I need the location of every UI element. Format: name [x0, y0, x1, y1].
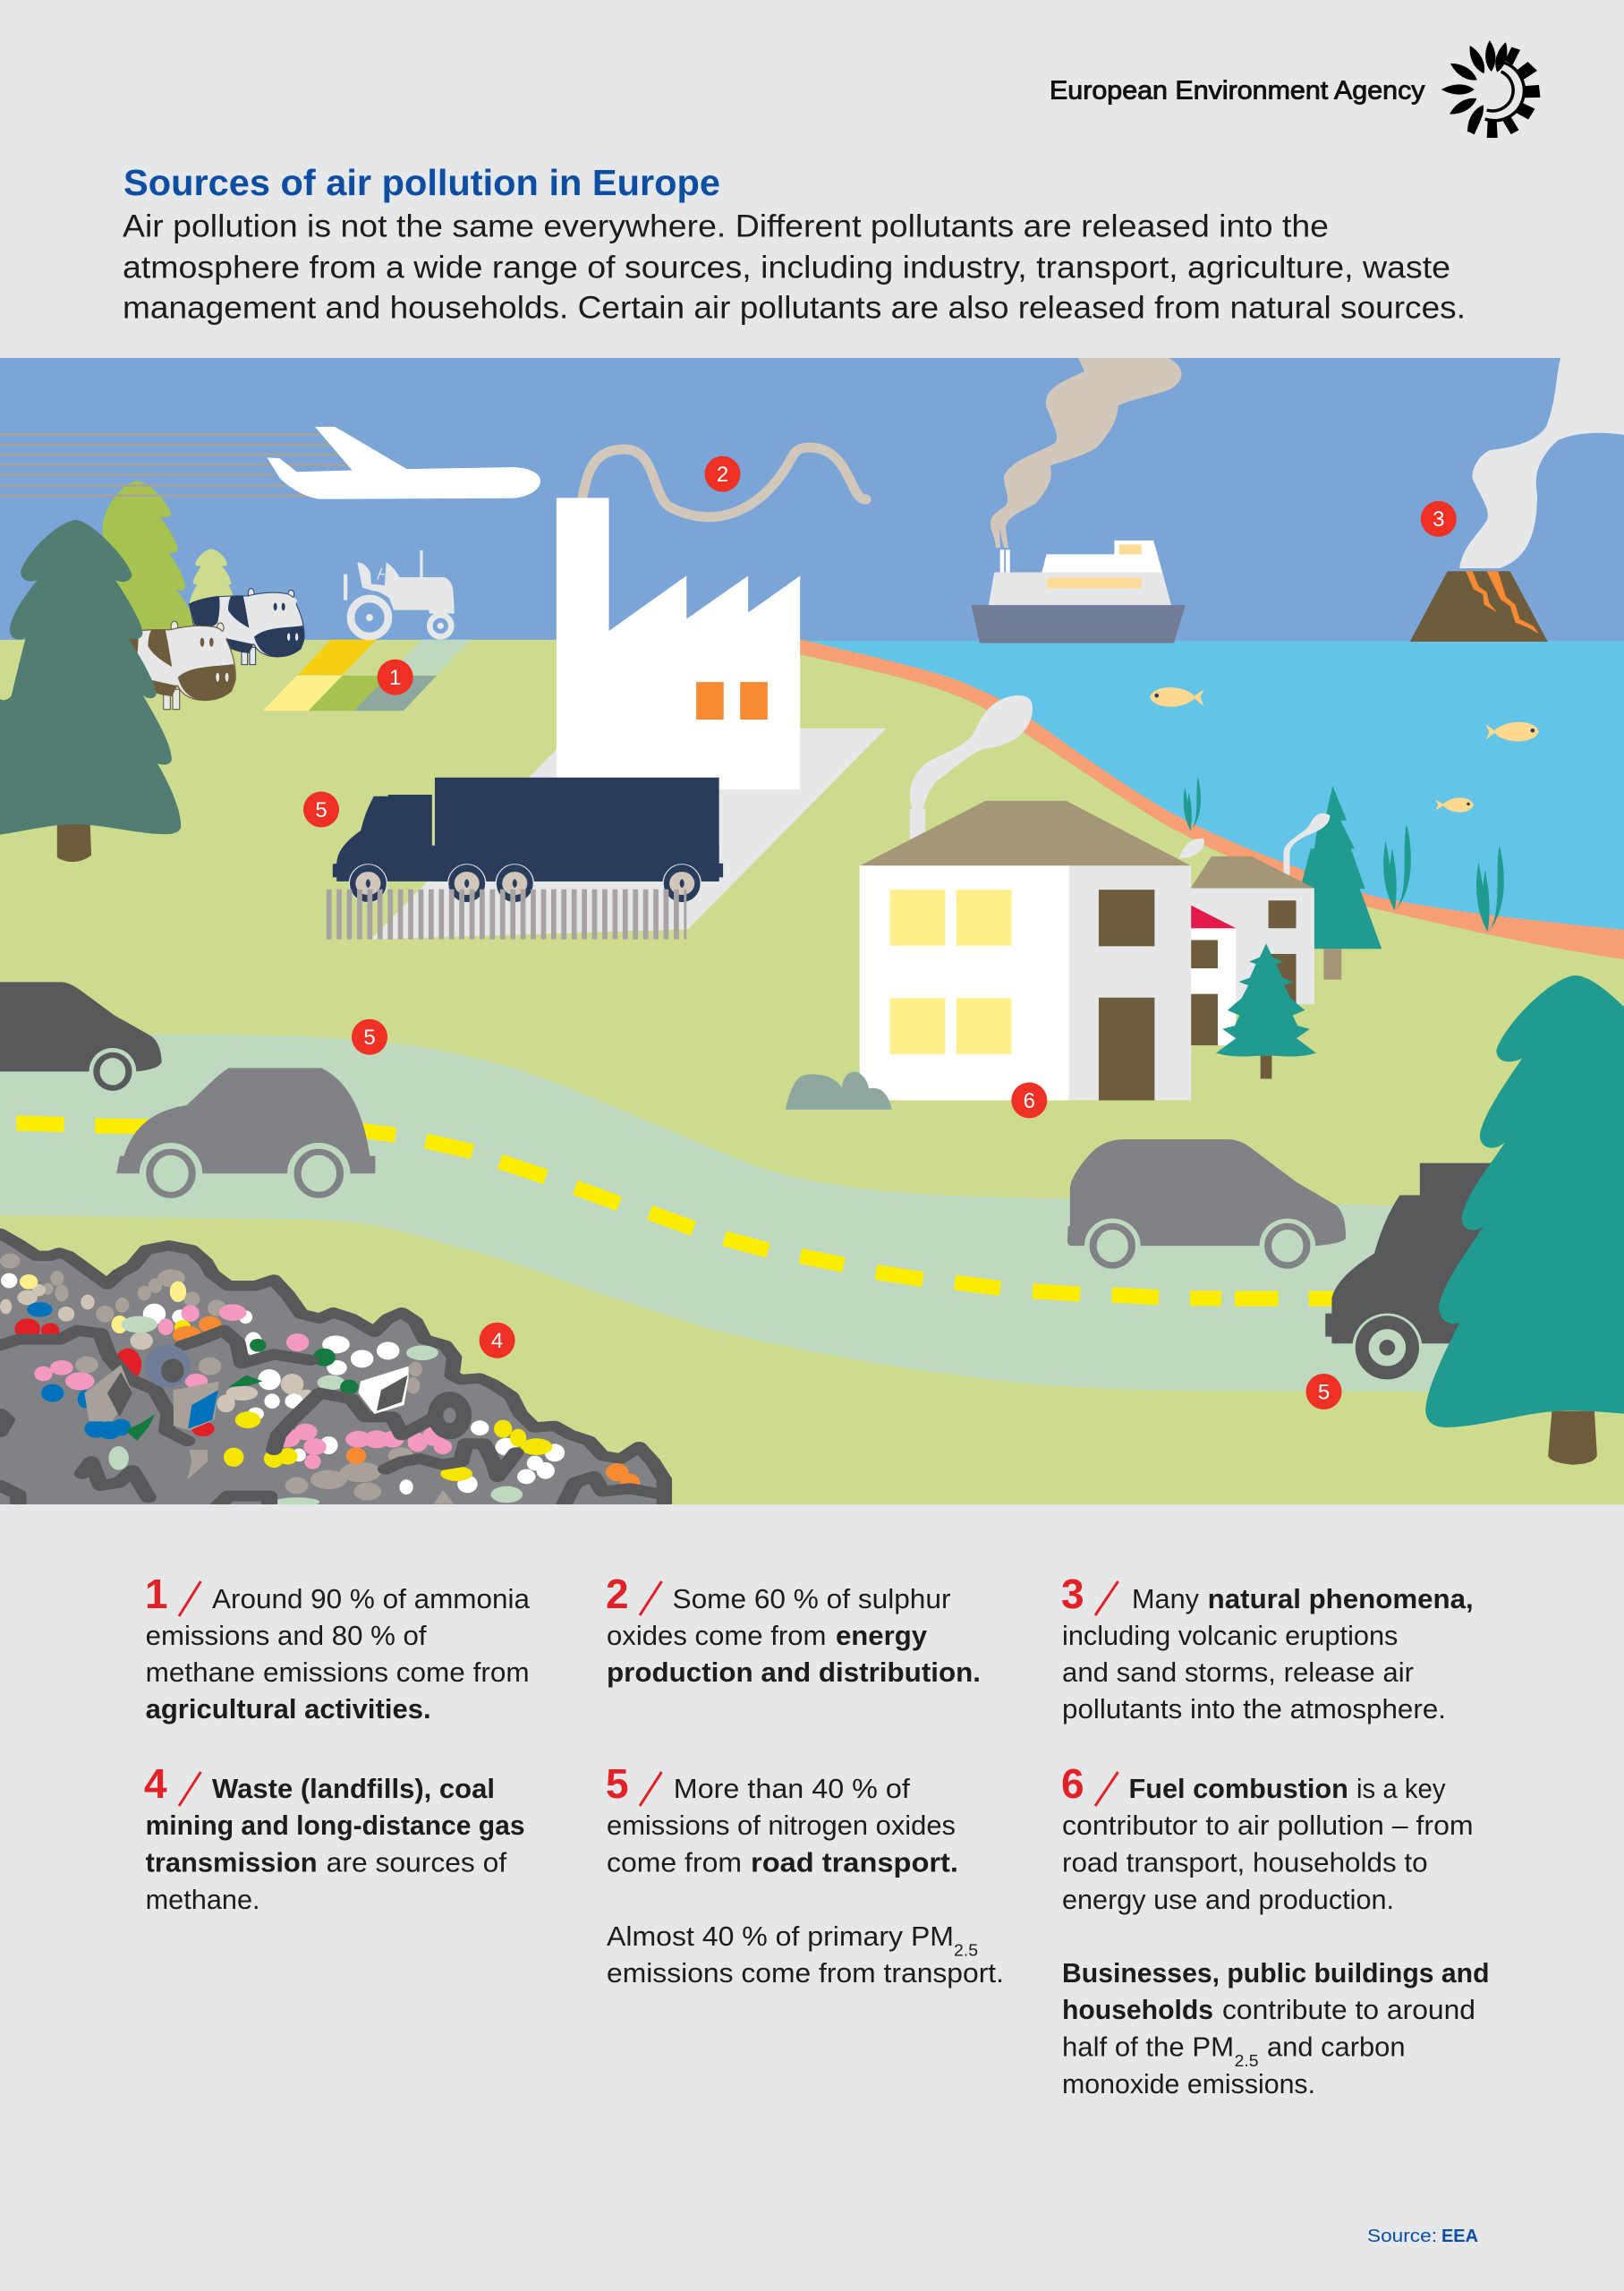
text block 6: households — [1062, 1995, 1213, 2025]
truck — [327, 778, 723, 915]
source — [1367, 2227, 1478, 2246]
text block 1: Around 90 % of ammonia — [212, 1584, 530, 1614]
landfill dark ridges — [0, 1331, 662, 1510]
text block 4 — [144, 1760, 525, 1915]
car: dark top left — [0, 982, 162, 1095]
text block 6: monoxide emissions. — [1062, 2069, 1315, 2099]
text block 6: Fuel combustion — [1129, 1774, 1348, 1804]
text block 5: Almost 40 % of primary PM — [607, 1921, 954, 1952]
sea — [792, 641, 1624, 972]
text block 5: 2.5 — [954, 1942, 978, 1960]
text block 5: emissions come from transport. — [607, 1958, 1004, 1989]
badge 5: road: 5 — [363, 1026, 376, 1050]
text block 6: contributor to air pollution – from — [1062, 1810, 1474, 1841]
bush — [786, 1072, 892, 1110]
truck: dark right — [1325, 1163, 1522, 1382]
badge 3: 3 — [1433, 507, 1444, 532]
text block 6: is a key — [1356, 1774, 1446, 1804]
ship smoke — [991, 358, 1182, 548]
text block 5: More than 40 % of — [674, 1774, 910, 1804]
tall teal tree — [1302, 786, 1382, 980]
coastline — [799, 639, 1624, 959]
middle house — [1191, 905, 1236, 1045]
text block 4: 4 — [144, 1760, 167, 1807]
text block 6: 2.5 — [1235, 2052, 1259, 2070]
big house chimney and smoke — [910, 695, 1204, 859]
text block 1: emissions and 80 % of — [146, 1621, 427, 1651]
text block 5: 5 — [606, 1760, 629, 1807]
badge 1: 1 — [389, 666, 401, 690]
badge 5: truck — [303, 791, 339, 827]
ship — [972, 541, 1186, 643]
waste: crate, tyre, computer, box — [84, 1345, 472, 1439]
logo: European Environment Agency: European Environment Agency — [1050, 77, 1425, 106]
landfill mound — [0, 1233, 664, 1519]
badge 4: 4 — [491, 1329, 503, 1353]
badge 5: road right: 5 — [1318, 1380, 1330, 1405]
text block 6: Businesses, public buildings and — [1062, 1958, 1489, 1989]
intro text: atmosphere from a wide range of sources, including industry, transport, agriculture, waste — [123, 251, 1450, 285]
text block 6: contribute to around — [1222, 1995, 1475, 2025]
text block 6: 6 — [1061, 1760, 1084, 1807]
text block 2: 2 — [606, 1571, 629, 1617]
text block 6: energy use and production. — [1062, 1885, 1394, 1915]
car: grey right — [1067, 1139, 1346, 1273]
text block 3 — [1061, 1571, 1474, 1725]
text block 2: production and distribution. — [607, 1657, 981, 1688]
land — [0, 640, 1624, 1504]
volcano — [1410, 571, 1548, 642]
cow: navy — [190, 589, 304, 665]
field plots — [262, 640, 471, 711]
source: EEA — [1441, 2227, 1478, 2246]
text block 1 — [145, 1571, 530, 1725]
text block 5: emissions of nitrogen oxides — [607, 1810, 956, 1841]
text block 3: pollutants into the atmosphere. — [1062, 1694, 1446, 1725]
text block 4: Waste (landfills), coal — [212, 1774, 495, 1804]
badge 6 — [1011, 1083, 1047, 1119]
text block 3: and sand storms, release air — [1062, 1657, 1414, 1688]
text block 2: oxides come from — [607, 1621, 826, 1651]
cow: brown — [128, 621, 236, 711]
big teal tree — [1425, 975, 1624, 1465]
badge 6: 6 — [1024, 1089, 1035, 1113]
text block 6: half of the PM — [1062, 2031, 1234, 2062]
factory — [557, 498, 800, 789]
seaweed — [1184, 777, 1504, 932]
panel: illustrated landscape — [0, 358, 1624, 1519]
small teal tree — [1216, 943, 1316, 1078]
text block 2: Some 60 % of sulphur — [673, 1584, 950, 1614]
badge 1 — [378, 660, 413, 695]
text block 1: methane emissions come from — [146, 1657, 530, 1688]
badge 3 — [1421, 501, 1457, 537]
text block 6 — [1061, 1760, 1489, 2099]
road — [0, 1035, 1521, 1392]
text block 1: 1 — [145, 1571, 168, 1617]
text block 5 — [606, 1760, 1004, 1989]
badge 5: road right — [1306, 1374, 1342, 1410]
text block 3: 3 — [1061, 1571, 1084, 1617]
factory yard — [371, 728, 887, 940]
text block 3: Many — [1132, 1584, 1200, 1614]
title: Sources of air pollution in Europe — [123, 162, 720, 203]
fish — [1150, 687, 1539, 813]
big dark-green tree — [0, 520, 181, 862]
factory smoke — [582, 447, 866, 517]
text block 1: agricultural activities. — [146, 1694, 431, 1725]
source: Source: — [1367, 2227, 1437, 2246]
logo: European Environment Agency — [1050, 40, 1541, 138]
text block 5: come from — [607, 1848, 742, 1878]
badge 2: 2 — [717, 463, 728, 487]
contrail lines — [0, 434, 348, 496]
text block 3: including volcanic eruptions — [1062, 1621, 1398, 1651]
intro text: Air pollution is not the same everywhere. Different pollutants are released into the — [123, 209, 1329, 243]
text block 4: transmission — [146, 1848, 318, 1878]
road dashes — [16, 1123, 1342, 1299]
badge 2 — [705, 456, 741, 492]
text block 6: and carbon — [1267, 2031, 1405, 2062]
volcano smoke — [1459, 358, 1624, 568]
text block 2: energy — [836, 1621, 927, 1651]
main house — [860, 801, 1191, 1101]
text block 3: natural phenomena, — [1208, 1584, 1474, 1614]
text block 6: road transport, households to — [1062, 1848, 1428, 1878]
text block 2 — [606, 1571, 981, 1688]
text block 4: are sources of — [327, 1848, 507, 1878]
back house — [1191, 813, 1330, 1004]
background green tree — [103, 481, 195, 632]
intro text: management and households. Certain air pollutants are also released from natural sources. — [123, 290, 1466, 326]
car: grey left — [116, 1068, 375, 1205]
landfill — [0, 1233, 664, 1519]
text block 4: methane. — [146, 1885, 260, 1915]
badge 5: truck: 5 — [315, 798, 327, 822]
tractor — [344, 550, 455, 636]
truck exhaust stripes — [326, 890, 687, 940]
intro text — [123, 209, 1466, 326]
badge 5: road — [352, 1019, 387, 1055]
badge 4 — [480, 1323, 515, 1358]
text block 4: mining and long-distance gas — [146, 1810, 525, 1841]
sky — [0, 358, 1624, 644]
airplane — [267, 427, 540, 499]
background pale tree — [190, 549, 234, 604]
text block 5: road transport. — [751, 1848, 958, 1878]
